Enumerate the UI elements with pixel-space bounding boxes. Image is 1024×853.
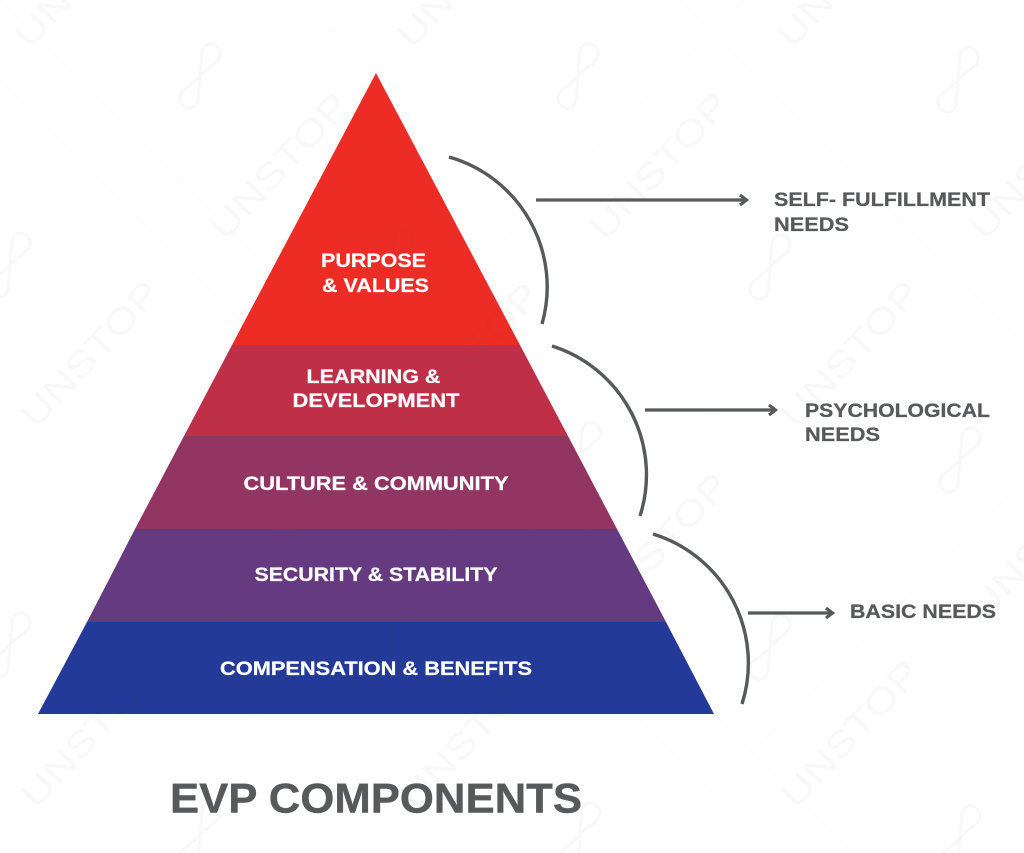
tier: security and stability: SECURITY & STABILITY xyxy=(254,564,498,586)
tier: culture and community xyxy=(135,436,617,529)
tier: purpose and values: PURPOSE xyxy=(321,250,426,272)
arrow: psychological xyxy=(645,405,776,415)
bracket: psychological xyxy=(552,346,646,516)
label: self-fulfillment needs xyxy=(774,189,990,236)
label: psychological needs: PSYCHOLOGICAL xyxy=(805,400,990,422)
bracket: self-fulfillment xyxy=(449,157,547,324)
label: psychological needs xyxy=(805,400,990,446)
tier: learning and development: DEVELOPMENT xyxy=(292,390,460,412)
watermark: UNSTOP xyxy=(392,274,548,437)
tier: culture and community: CULTURE & COMMUNITY xyxy=(244,473,508,495)
watermark: UNSTOP xyxy=(201,84,357,247)
watermark: UNSTOP xyxy=(581,464,737,627)
tier: security and stability xyxy=(87,529,666,622)
bracket: basic xyxy=(653,534,748,704)
tier: learning and development: LEARNING & xyxy=(306,366,440,388)
tier: compensation and benefits: COMPENSATION & BENEFITS xyxy=(220,658,532,680)
label: self-fulfillment needs: SELF- FULFILLMENT xyxy=(774,189,990,211)
arrow: self-fulfillment xyxy=(536,195,746,205)
watermark: UNSTOP xyxy=(201,464,357,627)
tier: learning and development xyxy=(184,345,568,436)
pyramid xyxy=(38,73,714,714)
label: basic needs: BASIC NEEDS xyxy=(850,601,996,623)
watermark: UNSTOP xyxy=(392,654,548,817)
label: self-fulfillment needs: NEEDS xyxy=(774,214,849,236)
tier: purpose and values xyxy=(232,73,520,345)
title: EVP COMPONENTS xyxy=(170,774,582,822)
label: psychological needs: NEEDS xyxy=(805,424,880,446)
watermark: UNSTOP xyxy=(12,652,168,815)
tier: purpose and values: & VALUES xyxy=(322,275,429,297)
watermark: UNSTOP xyxy=(772,652,928,815)
arrow: basic xyxy=(748,608,832,618)
watermark: UNSTOP xyxy=(12,272,168,435)
watermark: UNSTOP xyxy=(772,272,928,435)
tier: compensation and benefits xyxy=(38,622,714,714)
watermark: UNSTOP xyxy=(581,84,737,247)
